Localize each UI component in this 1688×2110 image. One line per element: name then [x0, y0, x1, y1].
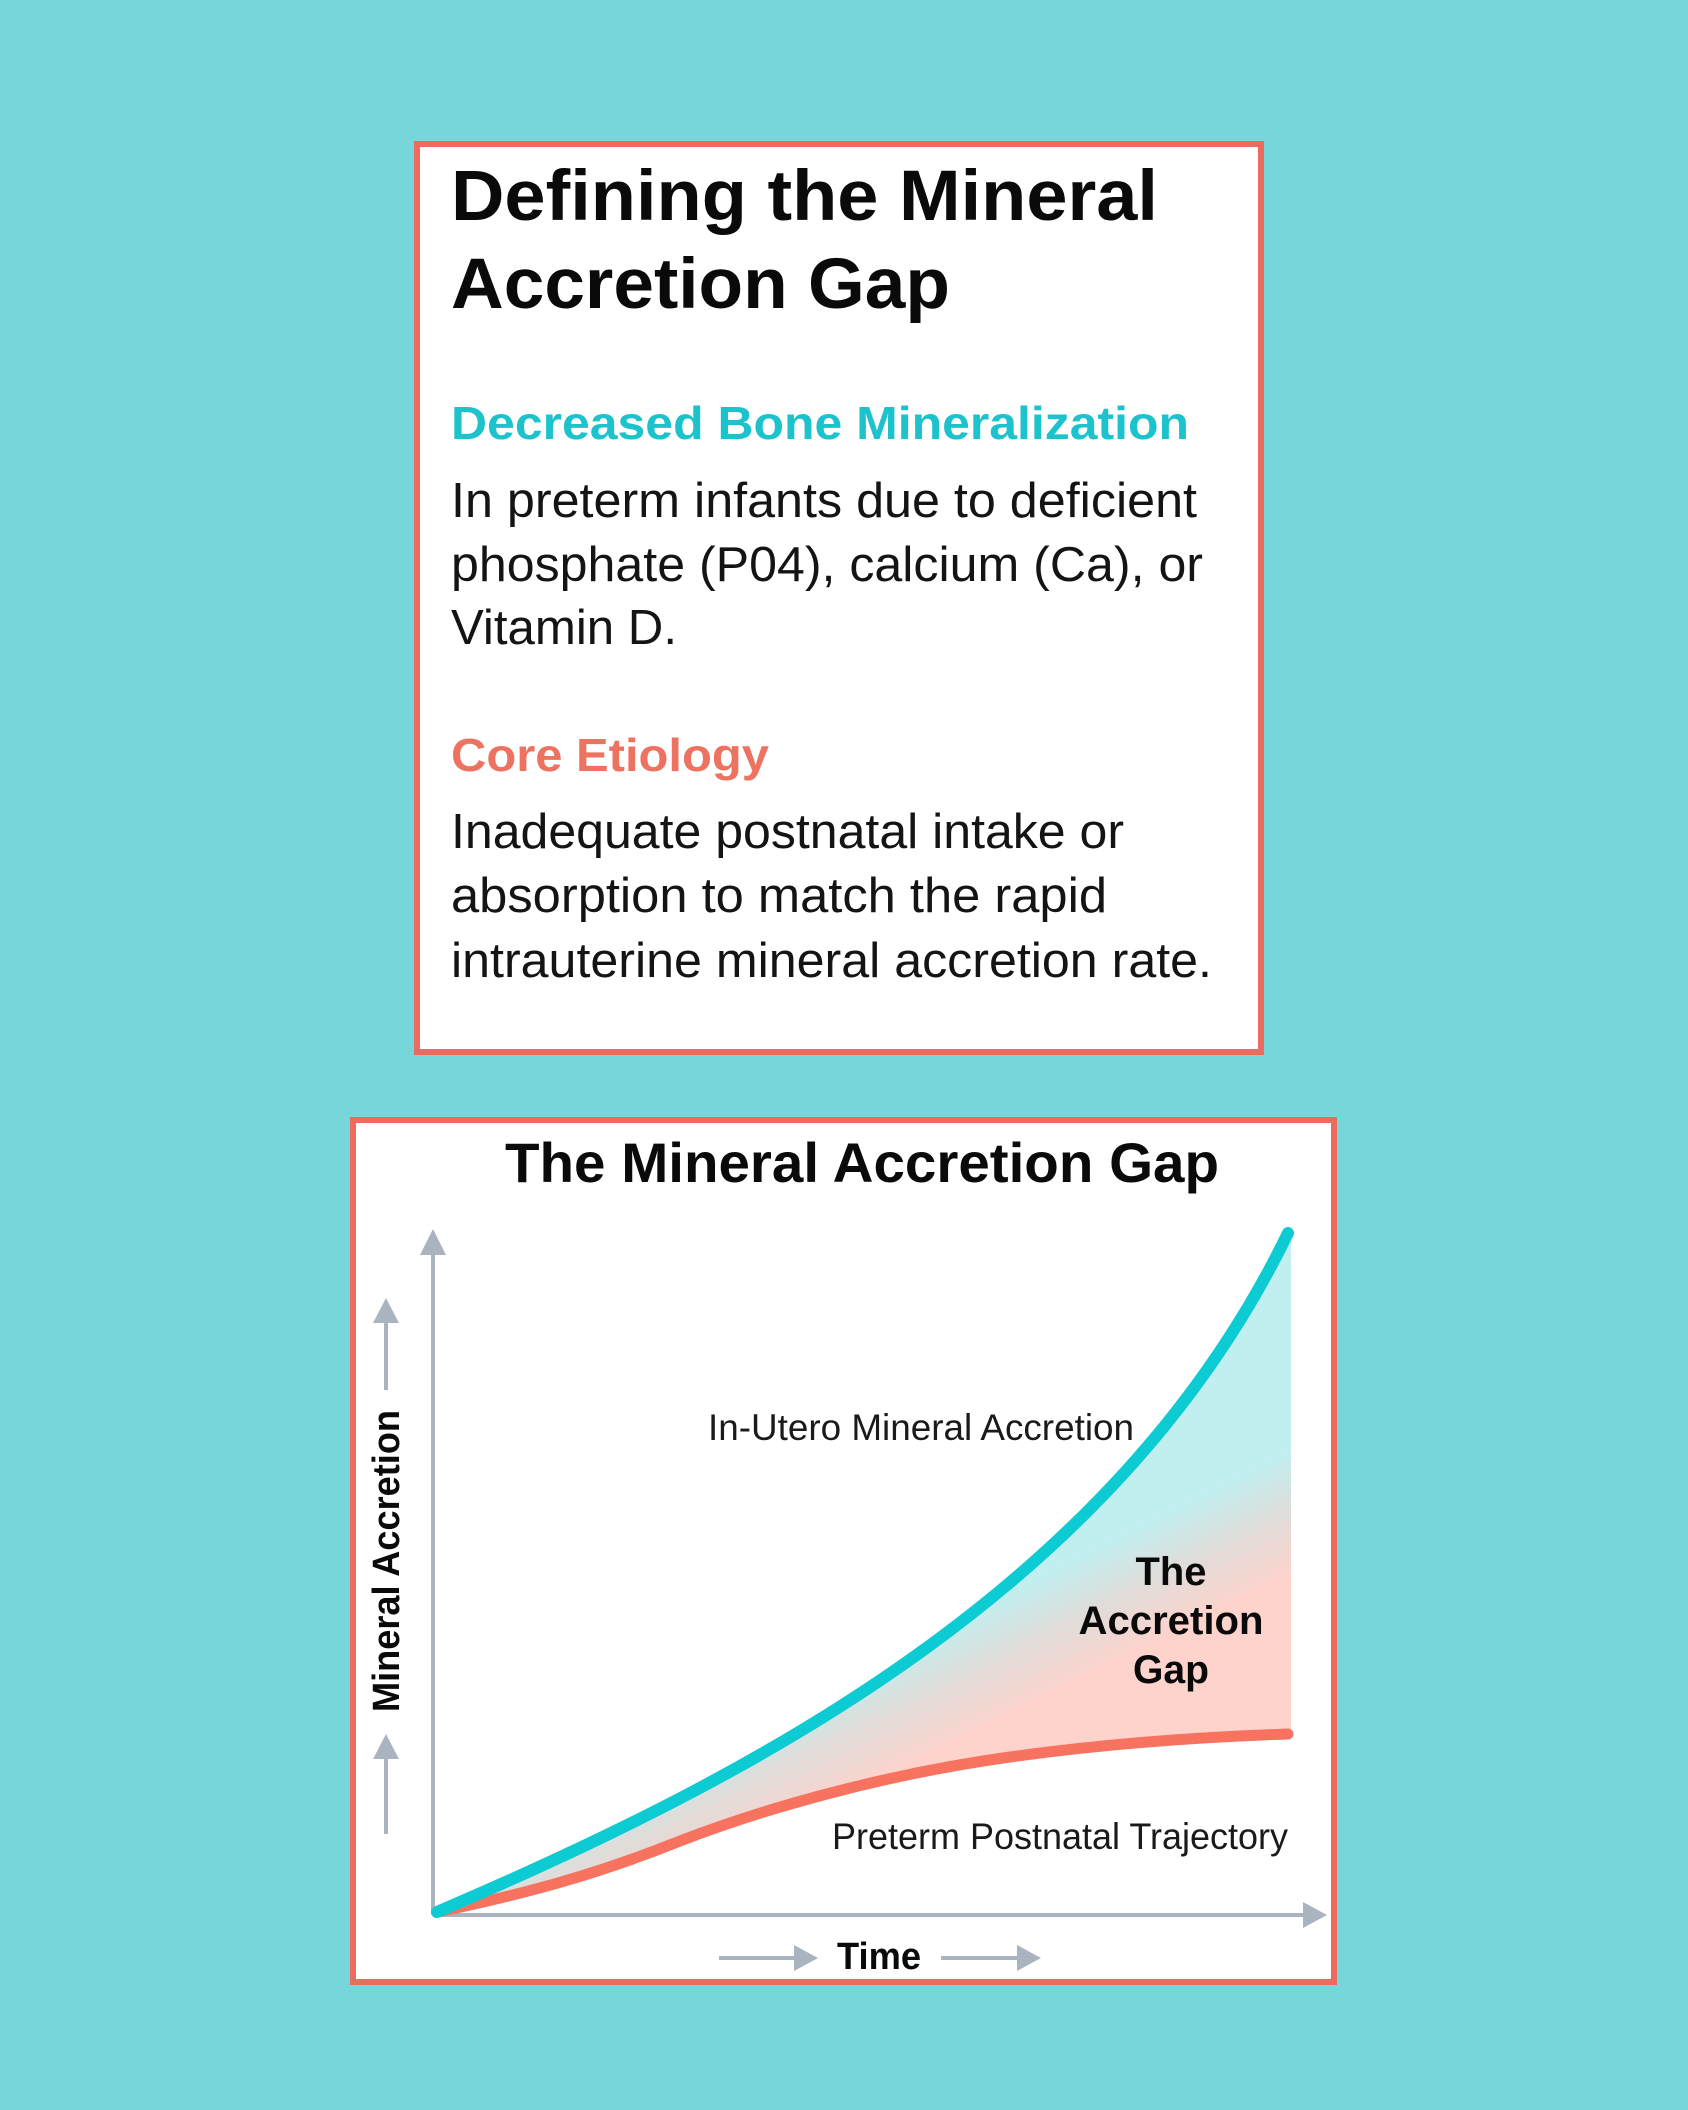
arrow: time left	[719, 1945, 818, 1971]
arrow: time right	[941, 1945, 1041, 1971]
gap fill area	[437, 1233, 1291, 1912]
label: preterm postnatal trajectory: Preterm Postnatal Trajectory	[832, 1816, 1288, 1857]
text block: bone mineralization: In preterm infants due to deficient	[451, 474, 1197, 528]
subheading: core etiology: Core Etiology	[451, 729, 769, 781]
label: in-utero mineral accretion: In-Utero Mineral Accretion	[708, 1407, 1134, 1448]
text block: core etiology	[451, 805, 1212, 988]
heading: Defining the Mineral	[451, 157, 1158, 236]
x axis	[433, 1902, 1327, 1928]
text block: core etiology: absorption to match the rapid	[451, 869, 1107, 923]
y axis label: Mineral Accretion	[366, 1410, 408, 1712]
text block: bone mineralization: Vitamin D.	[451, 601, 677, 655]
panel: chart	[353, 1120, 1334, 1982]
arrow: y label upper	[373, 1298, 399, 1390]
panel frame	[417, 144, 1261, 1052]
text block: core etiology: Inadequate postnatal intake or	[451, 805, 1124, 859]
heading	[451, 157, 1158, 324]
heading: Accretion Gap	[451, 245, 950, 324]
y axis	[420, 1229, 446, 1915]
subheading: decreased bone mineralization: Decreased Bone Mineralization	[451, 397, 1189, 449]
chart title: The Mineral Accretion Gap	[505, 1131, 1219, 1194]
label: the accretion gap	[1078, 1550, 1264, 1692]
text block: bone mineralization	[451, 474, 1203, 655]
label: the accretion gap: Gap	[1133, 1648, 1209, 1692]
curve: preterm postnatal trajectory	[437, 1734, 1288, 1912]
text block: core etiology: intrauterine mineral accretion rate.	[451, 934, 1212, 988]
text block: bone mineralization: phosphate (P04), calcium (Ca), or	[451, 538, 1203, 592]
arrow: y label lower	[373, 1734, 399, 1834]
panel: definition	[417, 144, 1261, 1052]
x axis label: Time	[837, 1936, 921, 1978]
panel frame	[353, 1120, 1334, 1982]
label: the accretion gap: The	[1136, 1550, 1206, 1594]
label: the accretion gap: Accretion	[1078, 1599, 1264, 1643]
curve: in-utero accretion	[437, 1233, 1288, 1912]
